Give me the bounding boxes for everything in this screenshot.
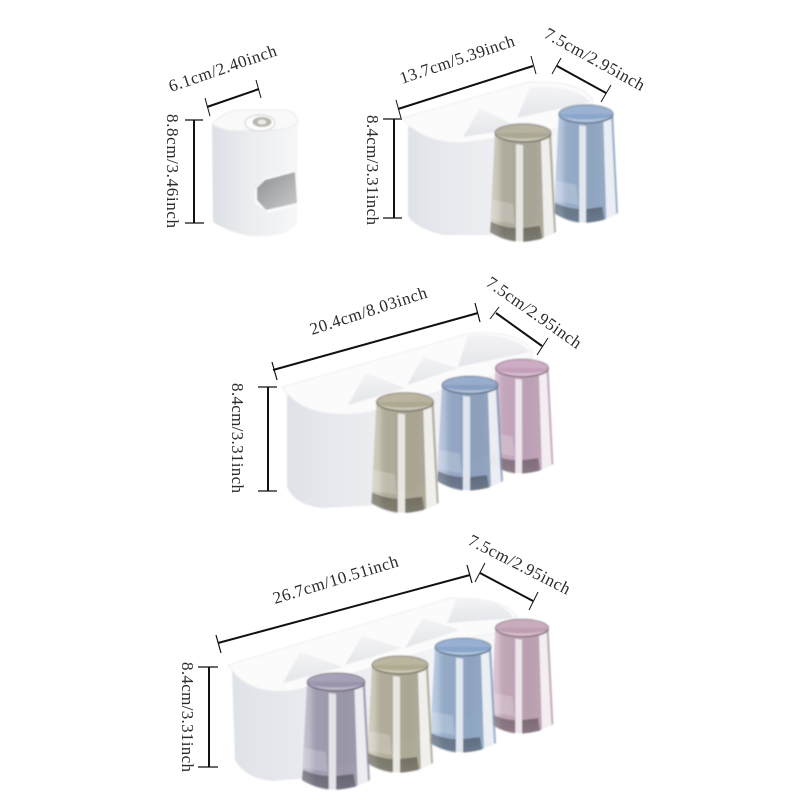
holder rim bbox=[228, 598, 517, 691]
label: four-cup height: 8.4cm/3.31inch bbox=[178, 662, 197, 772]
compartments bbox=[283, 598, 513, 683]
gold cup bbox=[367, 656, 433, 773]
blue cup bbox=[437, 376, 503, 491]
label: three-cup height: 8.4cm/3.31inch bbox=[228, 383, 247, 494]
pink cup bbox=[491, 619, 553, 734]
product: two-cup holder bbox=[402, 82, 600, 235]
label: four-cup width: 26.7cm/10.51inch bbox=[271, 552, 401, 608]
label: two-cup width: 13.7cm/5.39inch bbox=[397, 31, 517, 88]
blue cup bbox=[430, 638, 496, 753]
holder body bbox=[232, 617, 517, 781]
pink cup bbox=[491, 359, 553, 474]
dimension: three-cup height bbox=[258, 387, 277, 491]
dimension: four-cup depth bbox=[475, 563, 538, 610]
label: three-cup depth: 7.5cm/2.95inch bbox=[483, 273, 586, 353]
dimension: dispenser width bbox=[205, 80, 261, 116]
holder rim bbox=[282, 333, 533, 414]
label: three-cup width: 20.4cm/8.03inch bbox=[307, 283, 430, 339]
compartments bbox=[463, 87, 590, 137]
product: four-cup holder bbox=[228, 598, 517, 781]
product: single toothpaste dispenser bbox=[212, 110, 299, 236]
dimension: four-cup width bbox=[216, 565, 472, 653]
holder body bbox=[287, 352, 533, 508]
label: two-cup depth: 7.5cm/2.95inch bbox=[541, 24, 649, 95]
dimension: three-cup width bbox=[272, 303, 480, 380]
dimension: dispenser height bbox=[185, 120, 204, 223]
label: dispenser width: 6.1cm/2.40inch bbox=[166, 41, 280, 96]
dimension: three-cup depth bbox=[490, 307, 548, 355]
product: three-cup holder bbox=[282, 333, 533, 508]
dispenser window bbox=[255, 170, 299, 213]
holder body bbox=[408, 100, 600, 235]
dimension: two-cup depth bbox=[552, 58, 611, 102]
dimension: two-cup height bbox=[383, 119, 402, 218]
dispenser top face bbox=[212, 110, 298, 131]
dimension: two-cup width bbox=[396, 56, 536, 118]
purple cup bbox=[302, 673, 370, 790]
holder rim bbox=[402, 82, 593, 142]
label: four-cup depth: 7.5cm/2.95inch bbox=[465, 531, 574, 599]
label: two-cup height: 8.4cm/3.31inch bbox=[363, 115, 382, 226]
compartments bbox=[348, 335, 530, 405]
dimension: four-cup height bbox=[198, 667, 218, 767]
label: dispenser height: 8.8cm/3.46inch bbox=[163, 114, 182, 228]
gold cup bbox=[371, 393, 439, 513]
dispenser body bbox=[212, 110, 298, 236]
gold cup bbox=[490, 124, 556, 242]
dispenser button bbox=[245, 115, 275, 131]
blue cup bbox=[554, 105, 618, 223]
